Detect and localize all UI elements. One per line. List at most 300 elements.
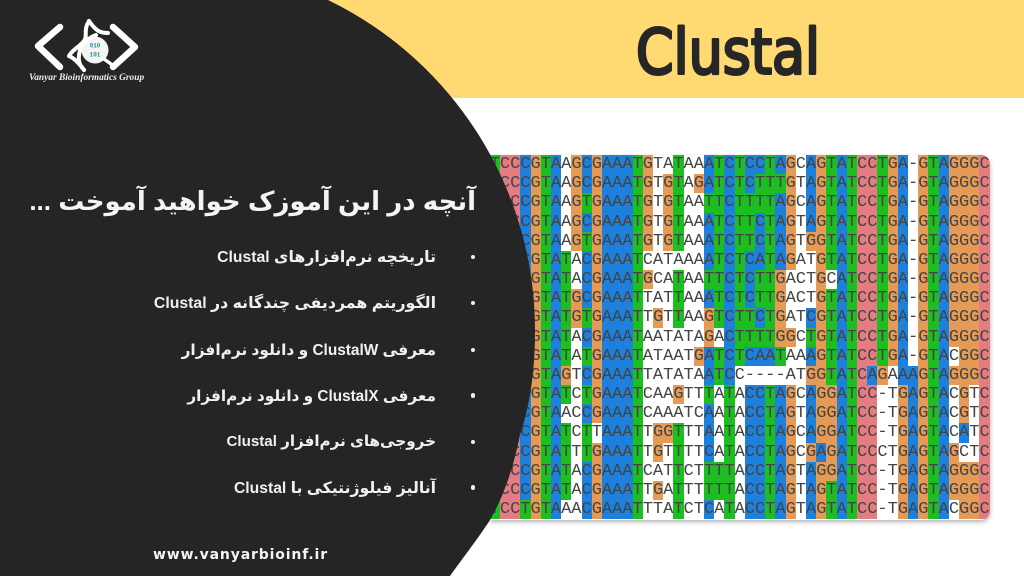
- panel: sequence alignment: T: [561, 481, 571, 500]
- panel: sequence alignment: G: [530, 270, 541, 289]
- panel: sequence alignment: T: [735, 174, 745, 193]
- panel: sequence alignment: G: [959, 385, 969, 404]
- panel: sequence alignment: AAA: [602, 328, 633, 347]
- panel: sequence alignment: C: [520, 423, 530, 442]
- panel: sequence alignment: A: [908, 404, 918, 423]
- panel: sequence alignment: C: [745, 270, 755, 289]
- panel: sequence alignment: A AATATA A C -: [571, 328, 918, 347]
- panel: sequence alignment: A: [551, 155, 561, 174]
- item 2: الگوریتم همردیفی چندگانه در Clustal: [154, 295, 436, 312]
- panel: sequence alignment: T: [765, 481, 775, 500]
- panel: sequence alignment: T: [673, 213, 684, 232]
- panel: sequence alignment: C: [979, 366, 990, 385]
- panel: sequence alignment: TT: [755, 289, 775, 308]
- panel: sequence alignment: A: [806, 500, 816, 519]
- panel: sequence alignment: A: [775, 385, 786, 404]
- panel: sequence alignment: T: [582, 193, 592, 212]
- panel: sequence alignment: A: [908, 462, 918, 481]
- panel: sequence alignment: C: [979, 308, 990, 327]
- panel: sequence alignment: G: [571, 289, 582, 308]
- panel: sequence alignment: A: [551, 462, 561, 481]
- panel: sequence alignment: G: [775, 308, 786, 327]
- panel: sequence alignment: G: [816, 270, 826, 289]
- panel: sequence alignment: T: [735, 251, 745, 270]
- panel: sequence alignment: A: [551, 193, 561, 212]
- panel: sequence alignment: G: [888, 155, 898, 174]
- panel: sequence alignment: CC: [857, 500, 877, 519]
- panel: sequence alignment: T: [541, 213, 551, 232]
- panel: sequence alignment: T: [877, 289, 888, 308]
- panel: sequence alignment: G: [643, 193, 653, 212]
- panel: sequence alignment: T: [490, 308, 500, 327]
- panel: sequence alignment: A: [551, 289, 561, 308]
- panel: sequence alignment: G: [918, 193, 928, 212]
- panel: sequence alignment: T: [633, 193, 643, 212]
- panel: sequence alignment: A: [908, 385, 918, 404]
- panel: sequence alignment: A: [806, 481, 816, 500]
- panel: sequence alignment: T: [877, 193, 888, 212]
- panel: sequence alignment: T: [826, 174, 837, 193]
- panel: sequence alignment: T: [633, 347, 643, 366]
- panel: sequence alignment: T: [582, 443, 592, 462]
- panel: sequence alignment: C: [582, 500, 592, 519]
- panel: sequence alignment: GGG: [949, 193, 979, 212]
- panel: sequence alignment: A: [775, 232, 786, 251]
- panel: sequence alignment: T: [704, 385, 714, 404]
- panel: sequence alignment: G: [816, 155, 826, 174]
- panel: sequence alignment: T: [541, 423, 551, 442]
- panel: sequence alignment: A: [939, 500, 949, 519]
- panel: sequence alignment: G: [888, 289, 898, 308]
- panel: sequence alignment: T: [673, 500, 684, 519]
- panel: sequence alignment: T: [714, 213, 724, 232]
- panel: sequence alignment: A: [898, 174, 908, 193]
- item 6: آنالیز فیلوژنتیکی با Clustal: [234, 480, 436, 497]
- panel: sequence alignment: A: [939, 251, 949, 270]
- panel: sequence alignment: C: [724, 366, 735, 385]
- panel: sequence alignment: G: [653, 443, 663, 462]
- panel: sequence alignment: CC: [857, 270, 877, 289]
- panel: sequence alignment: T: [928, 481, 939, 500]
- panel: sequence alignment: T: [673, 462, 684, 481]
- panel: sequence alignment: T: [541, 366, 551, 385]
- panel: sequence alignment: TTT: [755, 174, 786, 193]
- panel: sequence alignment: A: [704, 155, 714, 174]
- panel: sequence alignment: T: [765, 385, 775, 404]
- panel: sequence alignment: G: [888, 251, 898, 270]
- panel: sequence alignment: T: [673, 443, 684, 462]
- panel: sequence alignment: T: [633, 500, 643, 519]
- panel: sequence alignment: A: [898, 193, 908, 212]
- panel: sequence alignment: GG: [806, 366, 826, 385]
- panel: sequence alignment: G: [530, 462, 541, 481]
- panel: sequence alignment: T: [724, 423, 735, 442]
- panel: sequence alignment: G: [786, 385, 796, 404]
- panel: sequence alignment: AAA: [602, 347, 633, 366]
- panel: sequence alignment: C: [724, 270, 735, 289]
- panel: sequence alignment: CC: [745, 462, 765, 481]
- panel: sequence alignment: CC: [857, 251, 877, 270]
- panel: sequence alignment: CC: [500, 328, 520, 347]
- panel: sequence alignment: G: [571, 308, 582, 327]
- panel: sequence alignment: G: [571, 155, 582, 174]
- panel: sequence alignment: TTT: [704, 462, 735, 481]
- panel: sequence alignment: G: [530, 193, 541, 212]
- panel: sequence alignment: G: [918, 347, 928, 366]
- panel: sequence alignment: G: [888, 347, 898, 366]
- panel: sequence alignment: CC: [857, 155, 877, 174]
- panel: sequence alignment: G: [786, 193, 796, 212]
- panel: sequence alignment: AAA: [602, 481, 633, 500]
- panel: sequence alignment: T: [847, 385, 857, 404]
- panel: sequence alignment: CC: [857, 308, 877, 327]
- panel: sequence alignment: A: [837, 251, 847, 270]
- panel: sequence alignment: CC: [857, 462, 877, 481]
- panel: sequence alignment: A: [775, 213, 786, 232]
- panel: sequence alignment: AAA: [602, 443, 633, 462]
- panel: sequence alignment: T: [826, 155, 837, 174]
- panel: sequence alignment: T: [877, 347, 888, 366]
- panel: sequence alignment: CC: [500, 443, 520, 462]
- panel: sequence alignment: A: [898, 232, 908, 251]
- panel: sequence alignment: G: [888, 174, 898, 193]
- panel: sequence alignment: T TATATA C----AT A: [571, 366, 898, 385]
- panel: sequence alignment: CC: [500, 423, 520, 442]
- panel: sequence alignment: G: [643, 155, 653, 174]
- panel: sequence alignment: G: [530, 385, 541, 404]
- panel: sequence alignment: C: [520, 328, 530, 347]
- panel: sequence alignment: A: [939, 270, 949, 289]
- panel: sequence alignment: G: [898, 443, 908, 462]
- panel: sequence alignment: GG: [653, 423, 673, 442]
- logo: [34, 18, 138, 72]
- panel: sequence alignment: A: [551, 347, 561, 366]
- panel: sequence alignment: G: [653, 308, 663, 327]
- panel: sequence alignment: CC: [500, 404, 520, 423]
- panel: sequence alignment: C: [755, 213, 765, 232]
- panel: sequence alignment: AAA: [602, 462, 633, 481]
- panel: sequence alignment: G: [592, 308, 602, 327]
- panel: sequence alignment: T: [633, 481, 643, 500]
- panel: sequence alignment: CC: [857, 347, 877, 366]
- panel: sequence alignment: T: [541, 251, 551, 270]
- panel: sequence alignment: GG: [816, 385, 837, 404]
- panel: sequence alignment: A T A T -: [561, 174, 918, 193]
- panel: sequence alignment: A: [551, 213, 561, 232]
- panel: sequence alignment: T: [633, 462, 643, 481]
- panel: sequence alignment: G: [643, 232, 653, 251]
- panel: sequence alignment: C: [582, 481, 592, 500]
- panel: sequence alignment: AAA: [602, 270, 633, 289]
- panel: sequence alignment: A: [939, 155, 949, 174]
- panel: sequence alignment: A: [837, 423, 847, 442]
- panel: sequence alignment: G: [592, 289, 602, 308]
- panel: sequence alignment: G: [786, 232, 796, 251]
- panel: sequence alignment: A: [551, 251, 561, 270]
- panel: sequence alignment: A: [837, 232, 847, 251]
- panel: sequence alignment: T: [633, 404, 643, 423]
- panel: sequence alignment: T: [847, 289, 857, 308]
- panel: sequence alignment: A: [939, 385, 949, 404]
- panel: sequence alignment: T: [928, 155, 939, 174]
- panel: sequence alignment: T: [847, 155, 857, 174]
- panel: sequence alignment: G: [888, 328, 898, 347]
- panel: sequence alignment: AAA: [602, 308, 633, 327]
- panel: sequence alignment: C: [520, 174, 530, 193]
- panel: sequence alignment: A: [551, 366, 561, 385]
- panel: sequence alignment: A: [837, 443, 847, 462]
- panel: sequence alignment: G: [673, 385, 684, 404]
- panel: sequence alignment: G: [704, 308, 714, 327]
- panel: sequence alignment: C: [704, 443, 714, 462]
- panel: sequence alignment: C: [724, 251, 735, 270]
- panel: sequence alignment: G: [898, 385, 908, 404]
- panel: sequence alignment: A: [551, 232, 561, 251]
- panel: sequence alignment: G: [786, 443, 796, 462]
- panel: sequence alignment: C: [724, 193, 735, 212]
- panel: sequence alignment: A: [775, 251, 786, 270]
- panel: sequence alignment: C: [979, 193, 990, 212]
- panel: sequence alignment: T: [673, 174, 684, 193]
- panel: sequence alignment: GGG: [949, 251, 979, 270]
- panel: sequence alignment: CC: [857, 404, 877, 423]
- item 5: خروجی‌های نرم‌افزار Clustal: [226, 433, 436, 450]
- panel: sequence alignment: G: [592, 404, 602, 423]
- panel: sequence alignment: CC: [745, 423, 765, 442]
- panel: sequence alignment: T: [633, 213, 643, 232]
- panel: sequence alignment: G: [949, 443, 959, 462]
- panel: sequence alignment: T: [490, 328, 500, 347]
- panel: sequence alignment: T: [847, 481, 857, 500]
- panel: sequence alignment: GG: [816, 462, 837, 481]
- panel: sequence alignment: T: [541, 155, 551, 174]
- panel: sequence alignment: T: [561, 289, 571, 308]
- panel: sequence alignment: GGG: [949, 213, 979, 232]
- panel: sequence alignment: CC: [500, 193, 520, 212]
- panel: sequence alignment: T: [561, 328, 571, 347]
- panel: sequence alignment: CC: [500, 289, 520, 308]
- panel: sequence alignment: G: [643, 174, 653, 193]
- panel: sequence alignment: G: [571, 193, 582, 212]
- panel: sequence alignment: A: [837, 213, 847, 232]
- panel: sequence alignment: A: [837, 404, 847, 423]
- panel: sequence alignment: G: [530, 232, 541, 251]
- icon: dna helix and magnifier: 010: [90, 42, 101, 50]
- panel: sequence alignment: CC: [745, 500, 765, 519]
- panel: sequence alignment: T: [826, 193, 837, 212]
- panel: sequence alignment: A: [898, 308, 908, 327]
- panel: sequence alignment: T: [633, 270, 643, 289]
- panel: sequence alignment: T: [541, 328, 551, 347]
- panel: sequence alignment: A: [775, 481, 786, 500]
- panel: sequence alignment: AAA: [602, 174, 633, 193]
- panel: sequence alignment: A: [806, 174, 816, 193]
- panel: sequence alignment: C: [520, 366, 530, 385]
- panel: sequence alignment: C: [724, 289, 735, 308]
- panel: sequence alignment: A: [704, 404, 714, 423]
- panel: sequence alignment: A: [704, 251, 714, 270]
- panel: sequence alignment: T: [714, 289, 724, 308]
- panel: sequence alignment: A ATAAT AA - C: [571, 347, 959, 366]
- panel: sequence alignment: A: [939, 308, 949, 327]
- panel: sequence alignment: T: [561, 251, 571, 270]
- panel: sequence alignment: T: [633, 289, 643, 308]
- panel: sequence alignment: A: [704, 213, 714, 232]
- panel: sequence alignment: T: [806, 328, 816, 347]
- panel: sequence alignment: G: [592, 174, 602, 193]
- panel: sequence alignment: GGG: [949, 289, 979, 308]
- panel: sequence alignment: CC: [500, 481, 520, 500]
- panel: sequence alignment: GGG: [949, 481, 979, 500]
- panel: sequence alignment: A: [775, 193, 786, 212]
- panel: sequence alignment: G: [643, 213, 653, 232]
- panel: sequence alignment: T T T TT A A C CT CT: [571, 443, 979, 462]
- panel: sequence alignment: G: [786, 500, 796, 519]
- panel: sequence alignment: T: [714, 308, 724, 327]
- panel: sequence alignment: T: [826, 481, 837, 500]
- panel: sequence alignment: G: [816, 328, 826, 347]
- panel: sequence alignment: T: [724, 500, 735, 519]
- panel: sequence alignment: CC: [857, 443, 877, 462]
- panel: sequence alignment: A: [551, 174, 561, 193]
- panel: sequence alignment: G: [786, 174, 796, 193]
- panel: sequence alignment: G: [704, 328, 714, 347]
- panel: sequence alignment: T: [633, 366, 643, 385]
- panel: sequence alignment: T: [826, 366, 837, 385]
- panel: sequence alignment: T: [735, 347, 745, 366]
- panel: sequence alignment: A: [775, 155, 786, 174]
- panel: sequence alignment: G: [775, 270, 786, 289]
- panel: sequence alignment: GGG: [949, 366, 979, 385]
- bullet 5: [470, 440, 475, 444]
- panel: sequence alignment: T: [582, 232, 592, 251]
- panel: sequence alignment: A CATAAA AT -: [571, 251, 918, 270]
- panel: sequence alignment: G: [918, 328, 928, 347]
- panel: sequence alignment: TTTT: [735, 193, 775, 212]
- panel: sequence alignment: T: [490, 462, 500, 481]
- panel: sequence alignment: T: [735, 289, 745, 308]
- panel: sequence alignment: G: [530, 404, 541, 423]
- panel: sequence alignment: G: [592, 385, 602, 404]
- panel: sequence alignment: G: [663, 174, 673, 193]
- panel: sequence alignment: C: [582, 328, 592, 347]
- panel: sequence alignment: T: [928, 347, 939, 366]
- panel: sequence alignment: T: [826, 308, 837, 327]
- panel: sequence alignment: T: [673, 232, 684, 251]
- panel: sequence alignment: A: [898, 155, 908, 174]
- panel: sequence alignment: T: [877, 270, 888, 289]
- panel: sequence alignment: G: [530, 443, 541, 462]
- panel: sequence alignment: AAA: [602, 366, 633, 385]
- panel: sequence alignment: AAA: [602, 251, 633, 270]
- panel: sequence alignment: G: [643, 270, 653, 289]
- panel: sequence alignment: T: [673, 308, 684, 327]
- panel: sequence alignment: A: [551, 500, 561, 519]
- panel: sequence alignment: C: [979, 423, 990, 442]
- panel: sequence alignment: A T AA C -: [561, 193, 918, 212]
- panel: sequence alignment: G: [592, 443, 602, 462]
- panel: sequence alignment: T: [847, 193, 857, 212]
- panel: sequence alignment: G: [592, 500, 602, 519]
- panel: sequence alignment: T: [928, 385, 939, 404]
- panel: sequence alignment: T: [928, 443, 939, 462]
- panel: sequence alignment: CC: [745, 404, 765, 423]
- panel: sequence alignment: T: [541, 232, 551, 251]
- panel: sequence alignment: A: [939, 232, 949, 251]
- panel: sequence alignment: CC: [745, 385, 765, 404]
- panel: sequence alignment: T: [847, 308, 857, 327]
- panel: sequence alignment: C: [582, 213, 592, 232]
- panel: sequence alignment: T: [847, 500, 857, 519]
- panel: sequence alignment: T: [847, 270, 857, 289]
- panel: sequence alignment: T: [561, 423, 571, 442]
- panel: sequence alignment: C: [582, 289, 592, 308]
- panel: sequence alignment: G: [816, 289, 826, 308]
- bullet 2: [470, 300, 475, 305]
- panel: sequence alignment: T: [847, 404, 857, 423]
- panel: sequence alignment: G: [918, 462, 928, 481]
- panel: sequence alignment: G: [888, 213, 898, 232]
- panel: sequence alignment: C: [857, 366, 867, 385]
- panel: sequence alignment: G: [663, 193, 673, 212]
- panel: sequence alignment: T: [775, 347, 786, 366]
- panel: sequence alignment: C: [745, 289, 755, 308]
- panel: sequence alignment: CC: [500, 155, 520, 174]
- panel: sequence alignment: A: [898, 251, 908, 270]
- panel: sequence alignment: G: [816, 251, 826, 270]
- panel: sequence alignment: T: [735, 270, 745, 289]
- panel: sequence alignment: C: [755, 232, 765, 251]
- panel: sequence alignment: A: [837, 193, 847, 212]
- panel: sequence alignment: G: [816, 213, 826, 232]
- panel: sequence alignment: T: [765, 155, 775, 174]
- panel: sequence alignment: T: [877, 232, 888, 251]
- panel: sequence alignment: C: [979, 328, 990, 347]
- panel: sequence alignment: C: [979, 213, 990, 232]
- panel: sequence alignment: G: [918, 404, 928, 423]
- panel: sequence alignment: G: [653, 481, 663, 500]
- panel: sequence alignment: GGG: [949, 155, 979, 174]
- title: Clustal: [636, 16, 820, 88]
- panel: sequence alignment: A: [908, 443, 918, 462]
- panel: sequence alignment: CC: [500, 385, 520, 404]
- panel: sequence alignment: T: [490, 213, 500, 232]
- panel: sequence alignment: TT: [704, 193, 724, 212]
- panel: sequence alignment: T: [490, 193, 500, 212]
- panel: sequence alignment: C: [520, 232, 530, 251]
- panel: sequence alignment: CC: [500, 500, 520, 519]
- panel: sequence alignment: [490, 155, 990, 520]
- panel: sequence alignment: T: [765, 443, 775, 462]
- panel: sequence alignment: A: [837, 328, 847, 347]
- panel: sequence alignment: G: [592, 366, 602, 385]
- panel: sequence alignment: T: [847, 232, 857, 251]
- panel: sequence alignment: C: [724, 347, 735, 366]
- panel: sequence alignment: CC: [857, 328, 877, 347]
- bullet 3: [470, 348, 475, 352]
- panel: sequence alignment: G: [571, 174, 582, 193]
- panel: sequence alignment: T: [561, 385, 571, 404]
- panel: sequence alignment: G: [918, 385, 928, 404]
- panel: sequence alignment: C: [745, 174, 755, 193]
- panel: sequence alignment: C: [582, 462, 592, 481]
- panel: sequence alignment: T: [541, 347, 551, 366]
- panel: sequence alignment: A: [704, 174, 714, 193]
- panel: sequence alignment: A T AA T -: [561, 213, 918, 232]
- panel: sequence alignment: C: [520, 155, 530, 174]
- panel: sequence alignment: G: [816, 174, 826, 193]
- panel: sequence alignment: C: [979, 251, 990, 270]
